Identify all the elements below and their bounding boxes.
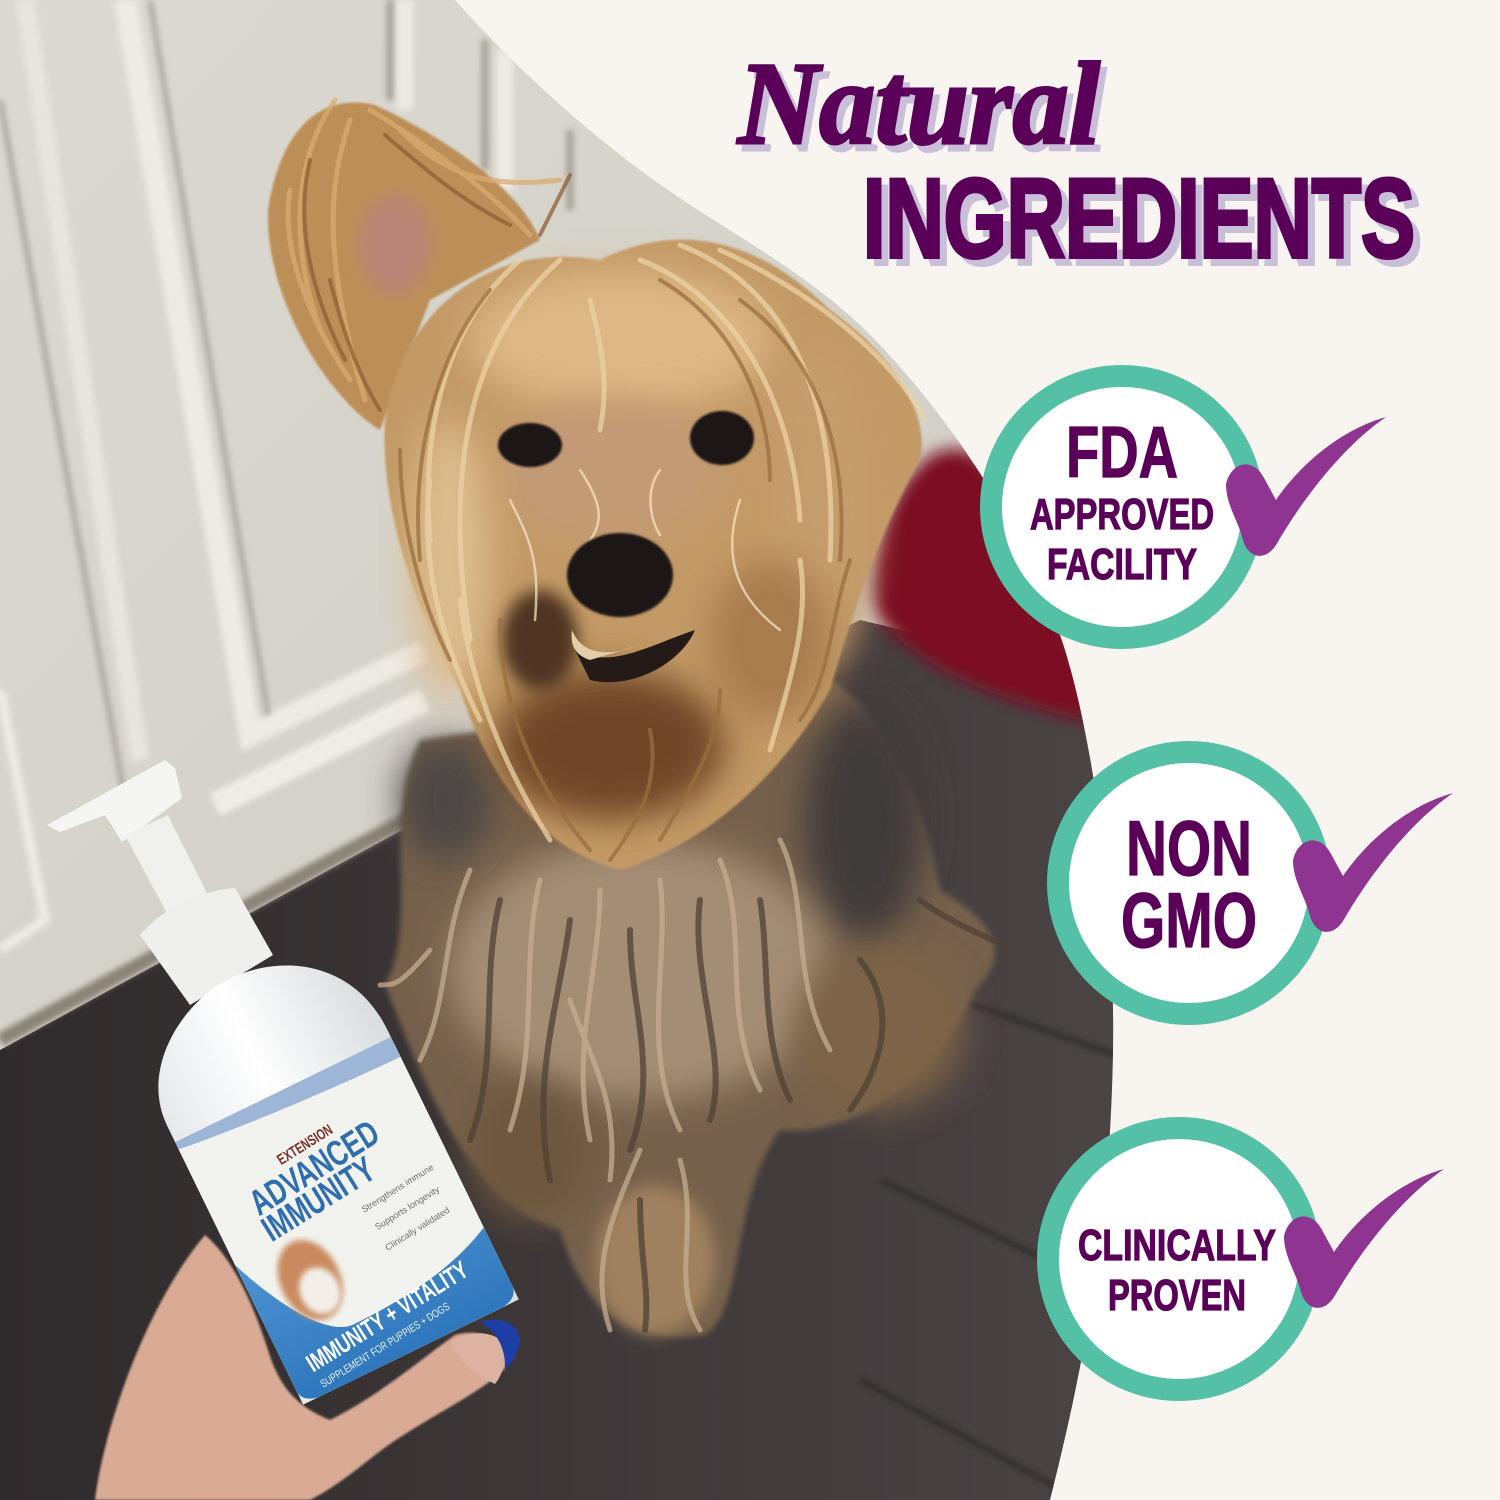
bottle label dog [273, 1236, 347, 1324]
badge: FDA approved facility: FACILITY [1047, 540, 1197, 589]
badge: FDA approved facility: APPROVED [1030, 490, 1214, 539]
badge: Clinically proven [1048, 1128, 1444, 1390]
title: Natural: Natural [742, 45, 1106, 176]
dog ear [268, 100, 570, 430]
bottle [47, 760, 519, 1405]
dog head [384, 240, 925, 870]
bottle label text: EXTENSION [274, 1121, 336, 1169]
bottle label text: Strengthens immune [360, 1162, 435, 1215]
bottle label text: Supports longevity [373, 1184, 442, 1232]
dog body [380, 680, 1010, 1336]
red toy [872, 449, 1100, 725]
badge: Clinically proven: PROVEN [1108, 1271, 1246, 1320]
bottle body [158, 966, 519, 1405]
title [736, 38, 1422, 288]
badge: Non GMO: NON [1126, 804, 1252, 892]
dog eyes [498, 411, 754, 467]
bottle label text: ADVANCED [242, 1112, 386, 1223]
bottle label text: Clinically validated [383, 1205, 451, 1253]
icon: check mark [1226, 417, 1386, 556]
bottle pump [47, 760, 273, 1005]
bottle label wave [235, 1228, 514, 1399]
badge: FDA approved facility: FDA [1066, 413, 1178, 493]
door background [0, 0, 1114, 1500]
bottle label text: IMMUNITY + VITALITY [301, 1256, 473, 1378]
badge: Non GMO [1058, 752, 1453, 1014]
badge: FDA approved facility [991, 376, 1386, 638]
bottle label [179, 1044, 519, 1405]
body fur strands [380, 840, 830, 1330]
badge: Clinically proven: CLINICALLY [1078, 1221, 1276, 1270]
dog mouth [572, 630, 695, 682]
photo: dog with supplement bottle [0, 0, 1114, 1500]
title: Natural: Natural [736, 38, 1100, 169]
thumb nail [450, 1333, 506, 1384]
floor [0, 620, 1200, 1500]
bottle label text: IMMUNITY [254, 1148, 382, 1249]
bottle label text: SUPPLEMENT FOR PUPPIES + DOGS [319, 1301, 452, 1390]
badge: Non GMO: GMO [1121, 876, 1257, 964]
dog nose [567, 533, 673, 617]
head fur strands [427, 245, 925, 840]
icon: check mark [1293, 793, 1453, 932]
bottle label text [252, 1122, 466, 1387]
hand [95, 1235, 520, 1500]
icon: check mark [1284, 1169, 1444, 1308]
